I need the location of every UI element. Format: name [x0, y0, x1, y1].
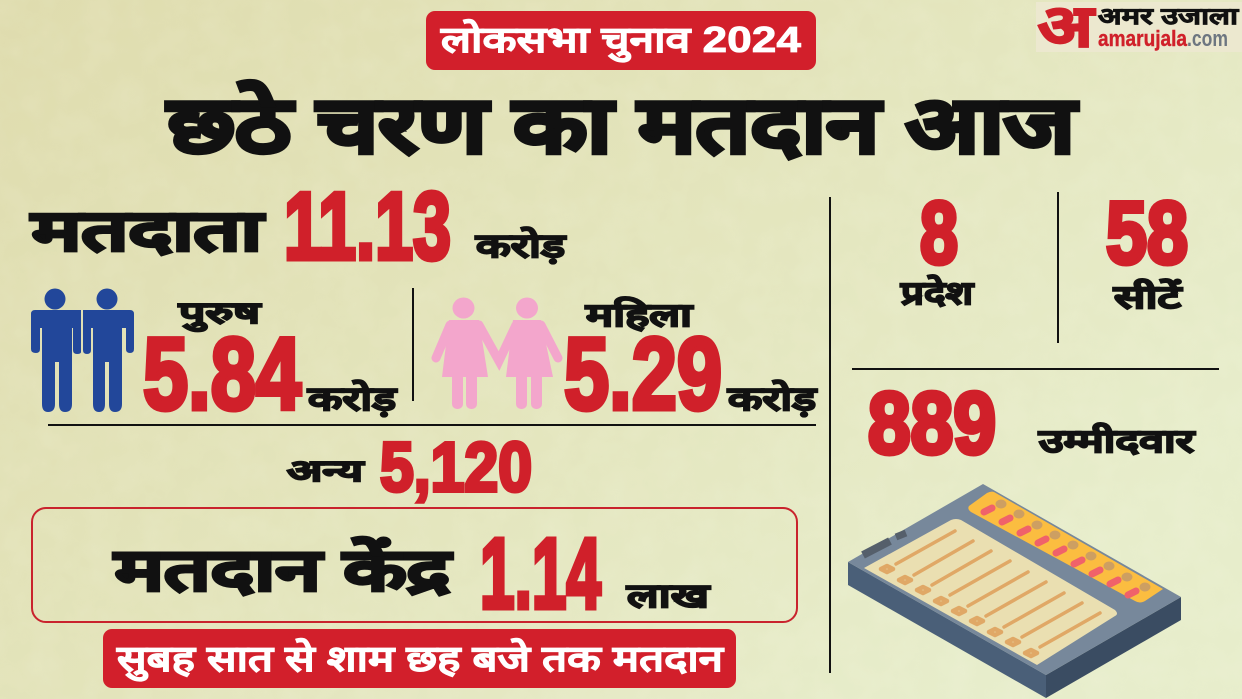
- female voters: करोड़: [727, 379, 818, 417]
- panel: polling stations: 1.14: [480, 518, 601, 630]
- voters headline: मतदाता: [31, 199, 266, 262]
- voters headline: करोड़: [475, 226, 567, 264]
- panel: polling stations: मतदान केंद्र: [114, 537, 453, 603]
- icon: two men: [31, 288, 134, 412]
- seat count: 58: [1106, 183, 1188, 282]
- state count: 8: [920, 183, 958, 282]
- other voters: अन्य: [287, 455, 365, 488]
- seat count: सीटें: [1113, 278, 1184, 315]
- header badge: [426, 11, 816, 70]
- male voters: [143, 297, 398, 431]
- other voters: 5,120: [380, 428, 532, 506]
- header badge: लोकसभा चुनाव 2024: [440, 19, 801, 63]
- logo: Amar Ujala: amarujala: [1098, 26, 1188, 51]
- female voters: [564, 296, 818, 431]
- footer badge: polling time: सुबह सात से शाम छह बजे तक मतदान: [116, 638, 725, 682]
- seat count: [1106, 183, 1188, 315]
- candidates: [868, 375, 1197, 472]
- candidates: 889: [868, 375, 996, 472]
- panel: polling stations: लाख: [626, 577, 710, 614]
- male voters: 5.84: [143, 317, 301, 431]
- voters headline: 11.13: [284, 173, 451, 280]
- voters headline: [31, 173, 567, 280]
- male voters: पुरुष: [177, 297, 263, 332]
- state count: प्रदेश: [900, 274, 975, 311]
- logo: Amar Ujala: [1036, 0, 1242, 59]
- logo: Amar Ujala: .com: [1187, 26, 1228, 51]
- title: छठे चरण का मतदान आज: [166, 80, 1079, 169]
- icon: two women: [436, 298, 558, 409]
- icon: EVM machine: [848, 484, 1181, 698]
- female voters: महिला: [585, 296, 694, 333]
- state count: [900, 183, 975, 311]
- other voters: [287, 428, 532, 506]
- footer badge: polling time: [103, 629, 736, 688]
- candidates: उम्मीदवार: [1038, 422, 1197, 459]
- logo: Amar Ujala: अमर उजाला: [1098, 3, 1239, 29]
- male voters: करोड़: [307, 379, 398, 417]
- panel: polling stations: [32, 508, 797, 630]
- female voters: 5.29: [564, 317, 722, 431]
